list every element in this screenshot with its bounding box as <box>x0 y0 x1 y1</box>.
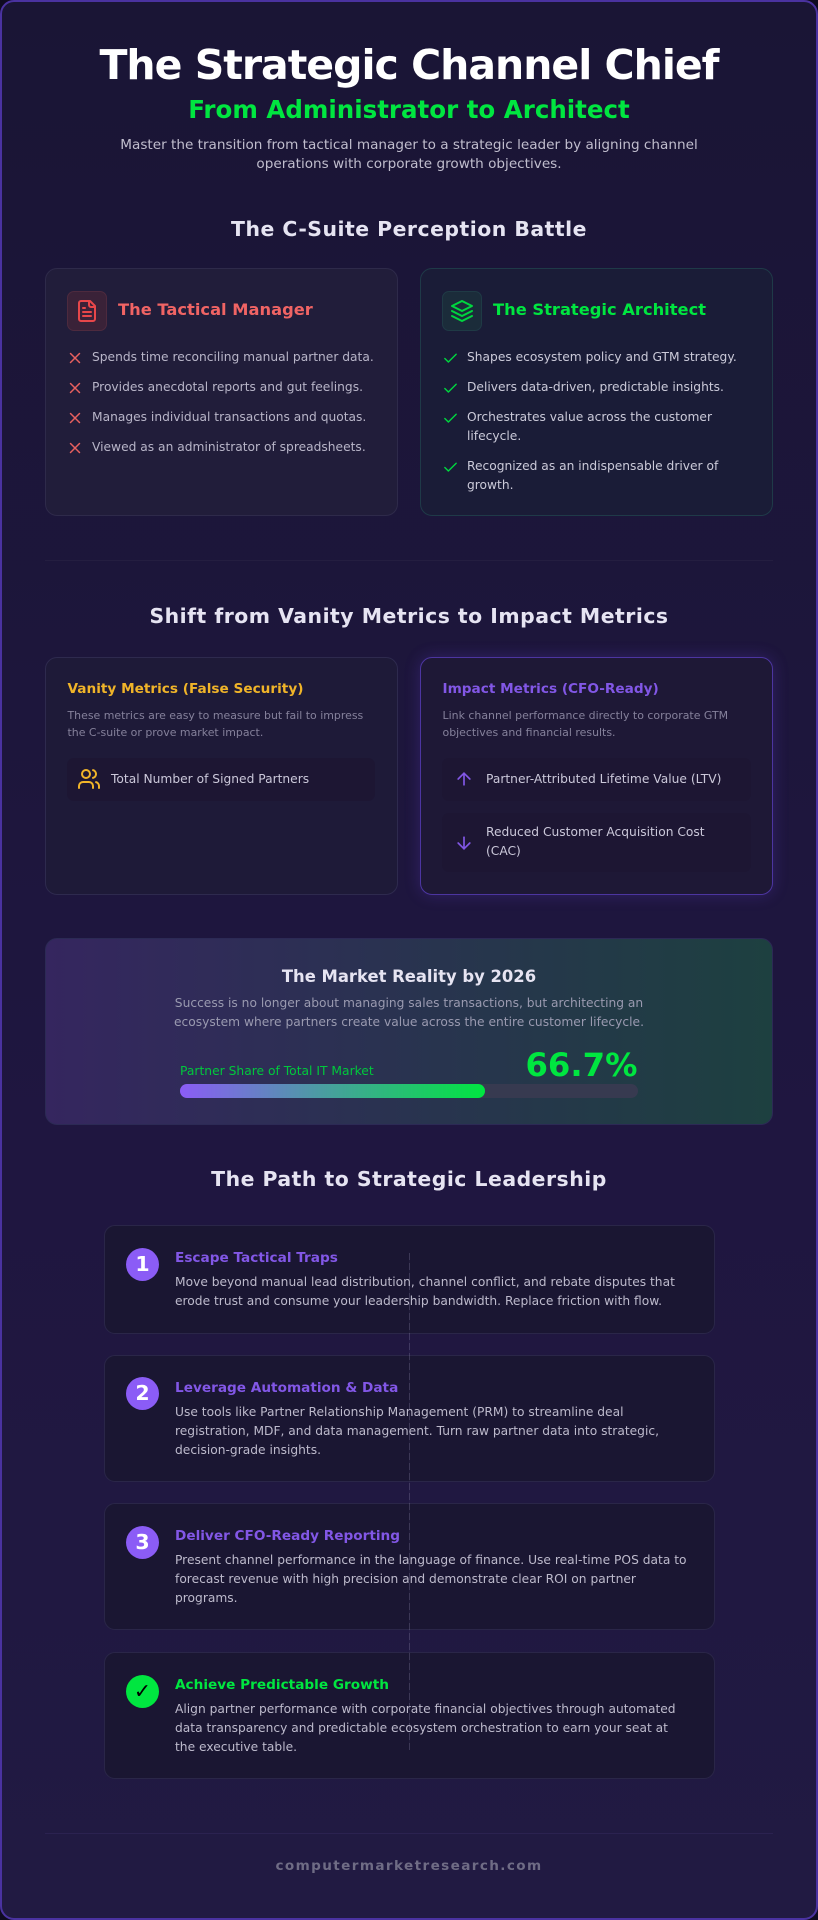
panel: the strategic architect <box>420 268 773 516</box>
panel description: ecosystem where partners create value across the entire customer lifecycle. <box>174 1015 644 1029</box>
step 2 card <box>104 1355 715 1482</box>
metric label: Partner-Attributed Lifetime Value (LTV) <box>486 772 721 786</box>
panel description: the C-suite or prove market impact. <box>68 726 263 738</box>
step body: Move beyond manual lead distribution, channel conflict, and rebate disputes that <box>175 1275 675 1289</box>
step body: forecast revenue with high precision and demonstrate clear ROI on partner <box>175 1572 636 1586</box>
icon: arrow down <box>457 836 471 850</box>
icon: layers <box>442 291 482 331</box>
check and item 3: Orchestrates value across the customer <box>467 410 712 424</box>
panel heading: Vanity Metrics (False Security) <box>68 681 303 697</box>
panel heading: Impact Metrics (CFO-Ready) <box>442 681 659 697</box>
step body: Align partner performance with corporate financial objectives through automated <box>175 1702 676 1716</box>
panel heading: The Strategic Architect <box>493 300 706 319</box>
step body: the executive table. <box>175 1740 297 1754</box>
icon: document <box>67 291 107 331</box>
title: The Strategic Channel Chief <box>99 41 719 89</box>
footer: computermarketresearch.com <box>275 1858 543 1874</box>
step title: Escape Tactical Traps <box>175 1250 338 1266</box>
step body: programs. <box>175 1591 238 1605</box>
progress value: 66.7% <box>525 1046 638 1084</box>
step title: Leverage Automation & Data <box>175 1380 398 1396</box>
metric label <box>486 825 705 858</box>
step body <box>175 1405 659 1457</box>
step check badge: ✓ <box>134 1679 151 1703</box>
step number <box>126 1526 159 1559</box>
metric label: Reduced Customer Acquisition Cost <box>486 825 705 839</box>
intro text: operations with corporate growth objectives. <box>256 156 562 172</box>
panel description: Link channel performance directly to corporate GTM <box>442 709 728 722</box>
step body <box>175 1553 687 1605</box>
icon: arrow up <box>457 772 471 786</box>
check and item 4 <box>444 459 719 492</box>
step number: 2 <box>135 1381 150 1405</box>
panel description: objectives and financial results. <box>442 726 616 738</box>
list: strategic traits <box>444 350 737 492</box>
metric label: Total Number of Signed Partners <box>111 772 309 786</box>
metric label: (CAC) <box>486 844 521 858</box>
panel description <box>174 996 644 1029</box>
step body: registration, MDF, and data management. Turn raw partner data into strategic, <box>175 1424 659 1438</box>
panel description <box>442 709 728 738</box>
step body <box>175 1702 676 1754</box>
panel heading: The Market Reality by 2026 <box>282 967 536 986</box>
cross and item 3: Manages individual transactions and quotas. <box>92 410 366 424</box>
step number <box>126 1377 159 1410</box>
panel: market reality <box>45 938 773 1125</box>
check and item 3: lifecycle. <box>467 429 521 443</box>
heading: metrics shift: Shift from Vanity Metrics to Impact Metrics <box>149 604 669 628</box>
metric row: lifetime value <box>442 758 751 801</box>
cross and item 1: Spends time reconciling manual partner data. <box>92 350 374 364</box>
step 4 card <box>104 1652 715 1779</box>
subtitle: From Administrator to Architect <box>188 95 630 124</box>
step 1 card <box>104 1225 715 1334</box>
panel description: These metrics are easy to measure but fail to impress <box>68 709 363 722</box>
progress label: Partner Share of Total IT Market <box>180 1064 374 1078</box>
step body: decision-grade insights. <box>175 1443 321 1457</box>
check and item 4: Recognized as an indispensable driver of <box>467 459 718 473</box>
step body: data transparency and predictable ecosystem orchestration to earn your seat at <box>175 1721 668 1735</box>
check and item 3 <box>444 410 712 443</box>
step 3 card <box>104 1503 715 1630</box>
step title: Deliver CFO-Ready Reporting <box>175 1528 400 1544</box>
progress fill 66.7% <box>180 1084 485 1098</box>
intro text: Master the transition from tactical manager to a strategic leader by aligning channel <box>120 137 698 153</box>
metric row: acquisition cost <box>442 813 751 872</box>
step number: 1 <box>135 1252 150 1276</box>
metric row: signed partners <box>67 758 375 801</box>
check and item 1: Shapes ecosystem policy and GTM strategy. <box>467 350 737 364</box>
progress bar <box>180 1084 638 1098</box>
step number <box>126 1248 159 1281</box>
heading: perception battle: The C-Suite Perception Battle <box>231 217 587 241</box>
heading: path to leadership: The Path to Strategic Leadership <box>211 1167 607 1191</box>
check and item 2: Delivers data-driven, predictable insights. <box>467 380 724 394</box>
list: tactical traits <box>70 350 374 454</box>
step number: 3 <box>135 1530 150 1554</box>
panel description <box>68 709 363 738</box>
panel: impact metrics <box>420 657 773 895</box>
step body <box>175 1275 675 1308</box>
step body: erode trust and consume your leadership bandwidth. Replace friction with flow. <box>175 1294 662 1308</box>
cross and item 2: Provides anecdotal reports and gut feelings. <box>92 380 363 394</box>
step body: Present channel performance in the language of finance. Use real-time POS data to <box>175 1553 687 1567</box>
step title: Achieve Predictable Growth <box>175 1677 389 1693</box>
intro text <box>120 137 698 172</box>
step body: Use tools like Partner Relationship Management (PRM) to streamline deal <box>175 1405 624 1419</box>
panel description: Success is no longer about managing sales transactions, but architecting an <box>175 996 643 1010</box>
check and item 4: growth. <box>467 478 514 492</box>
step check badge <box>126 1675 159 1708</box>
panel: vanity metrics <box>45 657 398 895</box>
panel: the tactical manager <box>45 268 398 516</box>
panel heading: The Tactical Manager <box>118 300 313 319</box>
icon: users <box>78 769 100 789</box>
cross and item 4: Viewed as an administrator of spreadsheets. <box>92 440 366 454</box>
